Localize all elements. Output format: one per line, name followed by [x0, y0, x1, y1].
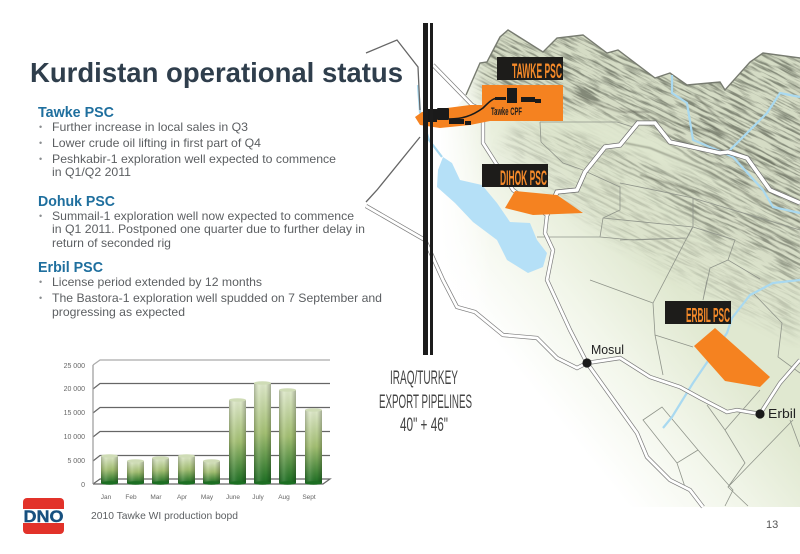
- city: Mosul: [582, 343, 624, 368]
- month labels: July: [252, 494, 265, 501]
- text block: Tawke PSC: Tawke PSC: [38, 104, 114, 121]
- bar: July: [254, 381, 271, 485]
- text block: Dohuk PSC: Dohuk PSC: [38, 193, 115, 210]
- export pipelines label: [379, 368, 472, 436]
- chart grid: [93, 360, 330, 484]
- label: Dihok PSC: [482, 164, 548, 190]
- bar chart: 2010 Tawke production: [64, 360, 330, 501]
- text block: Dohuk PSC: in Q1 2011. Postponed one quarter due to further delay in: [52, 222, 365, 236]
- month labels: Jan: [101, 494, 112, 501]
- map: terrain background: [456, 29, 800, 507]
- bar: Feb: [127, 459, 144, 485]
- Tawke CPF label: Tawke CPF: [491, 106, 522, 118]
- bar: Sept: [305, 408, 322, 485]
- month labels: Mar: [150, 494, 162, 501]
- text block: Tawke PSC: •: [39, 122, 42, 132]
- month labels: May: [201, 494, 214, 501]
- logo: DNO: [23, 498, 64, 534]
- month labels: Apr: [177, 494, 188, 501]
- text: DIHOK PSC: [500, 167, 547, 190]
- text block: Tawke PSC: •: [39, 154, 42, 164]
- y axis labels: 25 000: [64, 363, 85, 370]
- bar: Apr: [178, 454, 195, 485]
- text: ERBIL PSC: [686, 305, 730, 327]
- export pipelines label: EXPORT PIPELINES: [379, 392, 472, 413]
- text block: Erbil PSC: The Bastora-1 exploration well spudded on 7 September and: [52, 291, 382, 305]
- label: Tawke PSC: [497, 57, 563, 83]
- text block: Erbil PSC: Erbil PSC: [38, 259, 103, 276]
- Tawke facility icons: [424, 88, 541, 125]
- text block: Tawke PSC: [38, 104, 336, 179]
- text block: Erbil PSC: progressing as expected: [52, 305, 185, 319]
- title: Kurdistan operational status: [30, 57, 403, 88]
- bar: June: [229, 398, 246, 485]
- label: Erbil PSC: [665, 301, 731, 327]
- month labels: Sept: [302, 494, 316, 501]
- map top edge: [466, 30, 800, 95]
- bar: Jan: [101, 454, 118, 485]
- text block: Dohuk PSC: Summail-1 exploration well now expected to commence: [52, 209, 354, 223]
- logo: DNO: DNO: [24, 507, 64, 526]
- text block: Dohuk PSC: return of seconded rig: [52, 236, 171, 250]
- text block: Tawke PSC: in Q1/Q2 2011: [52, 165, 131, 179]
- map: block boundaries: [537, 122, 800, 506]
- block: Tawke PSC orange area: [415, 85, 563, 128]
- city: Erbil: Erbil: [768, 407, 796, 421]
- text block: Tawke PSC: Lower crude oil lifting in first part of Q4: [52, 136, 261, 150]
- y axis labels: [64, 363, 85, 489]
- text block: Erbil PSC: License period extended by 12 months: [52, 275, 262, 289]
- y axis labels: 5 000: [67, 458, 85, 465]
- y axis labels: 10 000: [64, 434, 85, 441]
- text block: Dohuk PSC: [38, 193, 365, 250]
- export pipelines label: 40" + 46": [400, 415, 448, 436]
- chart caption: 2010 Tawke WI production bopd: [91, 510, 238, 522]
- bar: Mar: [152, 456, 169, 485]
- export pipelines: black vertical lines: [423, 23, 433, 355]
- month labels: [101, 494, 316, 501]
- map: rivers and lake: [418, 75, 800, 428]
- city: Erbil: [755, 407, 796, 421]
- text block: Tawke PSC: Peshkabir-1 exploration well expected to commence: [52, 152, 336, 166]
- y axis labels: 15 000: [64, 410, 85, 417]
- y axis labels: 20 000: [64, 386, 85, 393]
- text block: Tawke PSC: •: [39, 138, 42, 148]
- text: TAWKE PSC: [512, 60, 562, 83]
- month labels: Aug: [278, 494, 290, 501]
- text block: Dohuk PSC: •: [39, 211, 42, 221]
- export pipelines label: IRAQ/TURKEY: [390, 368, 458, 389]
- lake: [437, 157, 547, 273]
- y axis labels: 0: [81, 482, 85, 489]
- month labels: Feb: [125, 494, 137, 501]
- bar: May: [203, 459, 220, 485]
- bar: Aug: [279, 388, 296, 485]
- text block: Erbil PSC: •: [39, 277, 42, 287]
- block: Erbil PSC orange area: [694, 328, 770, 387]
- text block: Erbil PSC: [38, 259, 382, 319]
- block: Dihok PSC orange area: [505, 191, 583, 215]
- page number: 13: [766, 519, 778, 531]
- text block: Erbil PSC: •: [39, 293, 42, 303]
- map: pipelines: [366, 40, 800, 507]
- city: Mosul: Mosul: [591, 343, 624, 357]
- text block: Tawke PSC: Further increase in local sales in Q3: [52, 120, 248, 134]
- month labels: June: [226, 494, 240, 501]
